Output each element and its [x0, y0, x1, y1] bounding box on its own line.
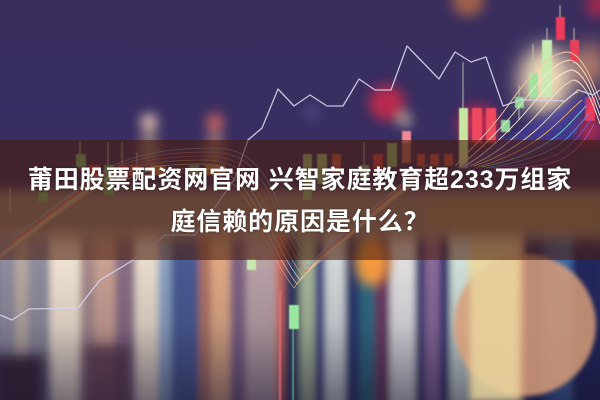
- title: 莆田股票配资网官网 兴智家庭教育超233万组家: [28, 166, 572, 194]
- white price line: [0, 46, 600, 320]
- blurred city light reflections: [0, 228, 600, 400]
- large peach bokeh circle: [454, 254, 596, 396]
- rainbow ribbon: left and centre sweep: [0, 148, 428, 288]
- dark lower-left corner: [0, 355, 45, 400]
- warm brown strip behind the band: [0, 190, 600, 240]
- rainbow ribbon: right fan: [455, 52, 600, 170]
- translucent title band: [0, 140, 600, 260]
- orange glow: [355, 238, 389, 286]
- title: 庭信赖的原因是什么？: [170, 208, 430, 236]
- pale glow behind the candles: [519, 43, 600, 114]
- title: [28, 166, 572, 236]
- sky bokeh lights: [140, 0, 600, 172]
- darkening toward the bottom: [0, 260, 600, 400]
